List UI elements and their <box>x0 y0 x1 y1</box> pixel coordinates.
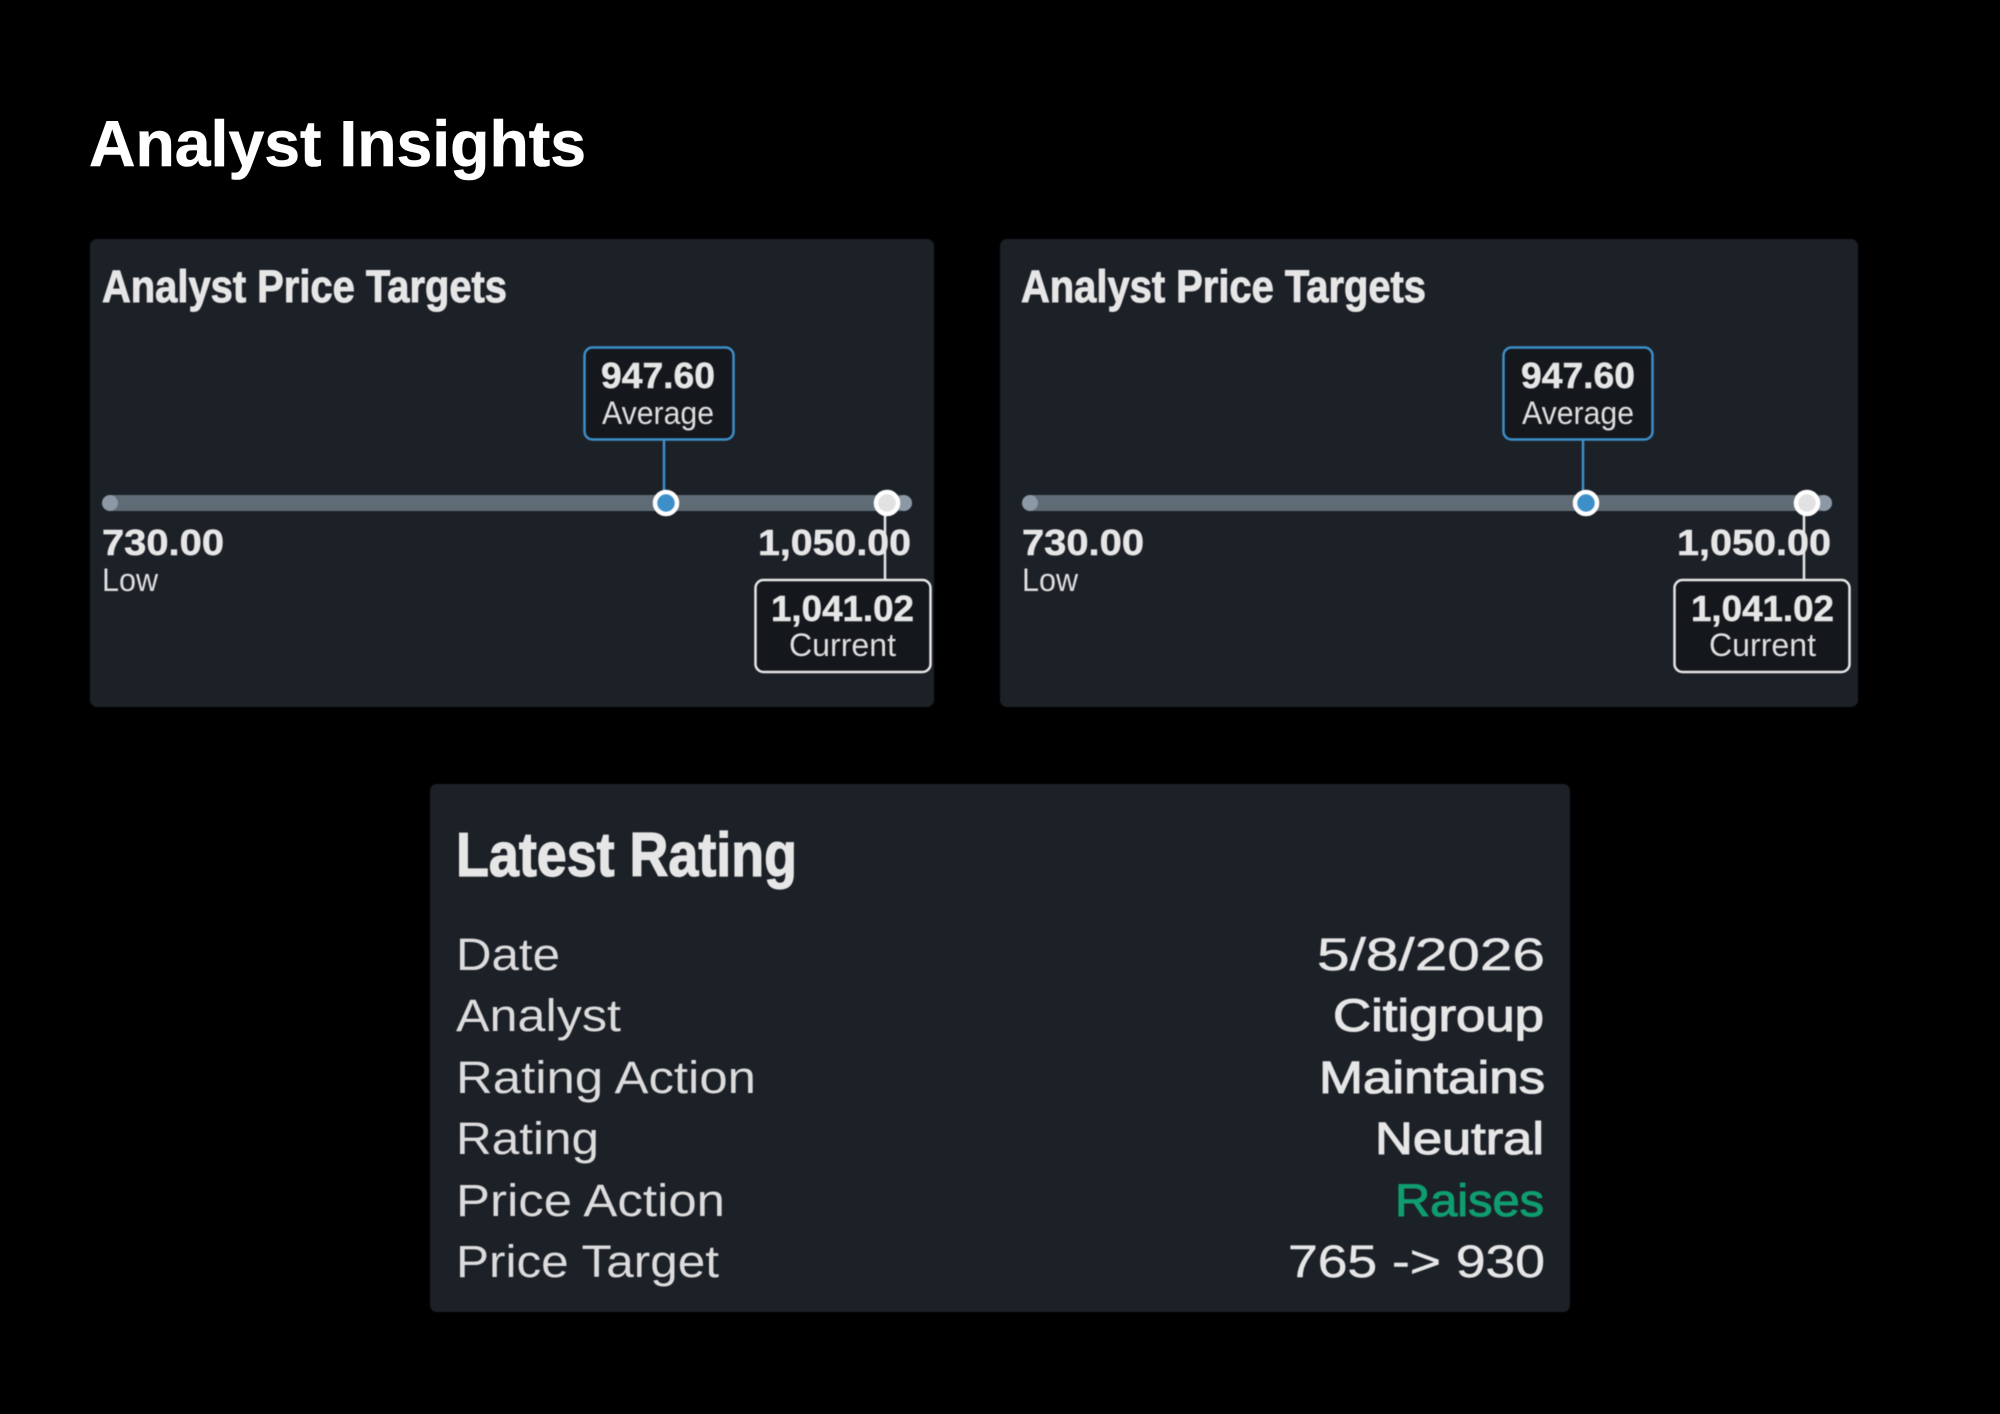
row: rating action: Rating Action <box>456 1052 756 1103</box>
current price marker: 1,041.02 <box>1691 588 1834 629</box>
row: rating <box>456 1113 1544 1164</box>
row: analyst: Analyst <box>456 990 622 1041</box>
panel background <box>1000 239 1858 707</box>
low value label <box>102 522 224 598</box>
row: price action: Raises <box>1395 1175 1544 1226</box>
low value label: Low <box>1022 562 1079 598</box>
low value label <box>1022 522 1144 598</box>
current price marker: Current <box>789 627 896 663</box>
current price marker <box>1674 492 1850 672</box>
average marker: 947.60 <box>1521 355 1635 396</box>
row: rating: Rating <box>456 1113 599 1164</box>
high value label: 1,050.00 <box>758 522 911 563</box>
panel heading: Analyst Price Targets <box>102 261 507 312</box>
average marker: Average <box>602 395 714 431</box>
title: Analyst Insights <box>89 107 586 180</box>
panel heading: Analyst Price Targets <box>1021 261 1426 312</box>
row: date: 5/8/2026 <box>1317 929 1545 980</box>
low value label: 730.00 <box>1022 522 1144 563</box>
panel: latest rating <box>430 784 1570 1312</box>
row: price action: Price Action <box>456 1175 725 1226</box>
high value label: 1,050.00 <box>1677 522 1831 563</box>
row: analyst: Citigroup <box>1333 990 1544 1041</box>
row: price target: 765 -> 930 <box>1288 1236 1545 1287</box>
row: rating action <box>456 1052 1545 1103</box>
row: date <box>456 929 1545 980</box>
row: price target: Price Target <box>456 1236 720 1287</box>
row: date: Date <box>456 929 560 980</box>
row: rating: Neutral <box>1375 1113 1544 1164</box>
range track <box>1022 495 1832 511</box>
current price marker: 1,041.02 <box>771 588 914 629</box>
row: price action <box>456 1175 1544 1226</box>
low value label: 730.00 <box>102 522 224 563</box>
panel: analyst price targets right <box>1000 239 1858 707</box>
average marker <box>584 348 734 514</box>
current price marker: Current <box>1709 627 1816 663</box>
average marker: 947.60 <box>601 355 715 396</box>
panel background <box>430 784 1570 1312</box>
range track <box>102 495 912 511</box>
panel heading: Latest Rating <box>456 821 797 890</box>
low value label: Low <box>102 562 159 598</box>
panel: analyst price targets left <box>90 239 934 707</box>
average marker <box>1504 348 1652 514</box>
row: rating action: Maintains <box>1319 1052 1545 1103</box>
average marker: Average <box>1522 395 1634 431</box>
row: analyst <box>456 990 1544 1041</box>
current price marker <box>756 492 930 672</box>
row: price target <box>456 1236 1545 1287</box>
panel background <box>90 239 934 707</box>
